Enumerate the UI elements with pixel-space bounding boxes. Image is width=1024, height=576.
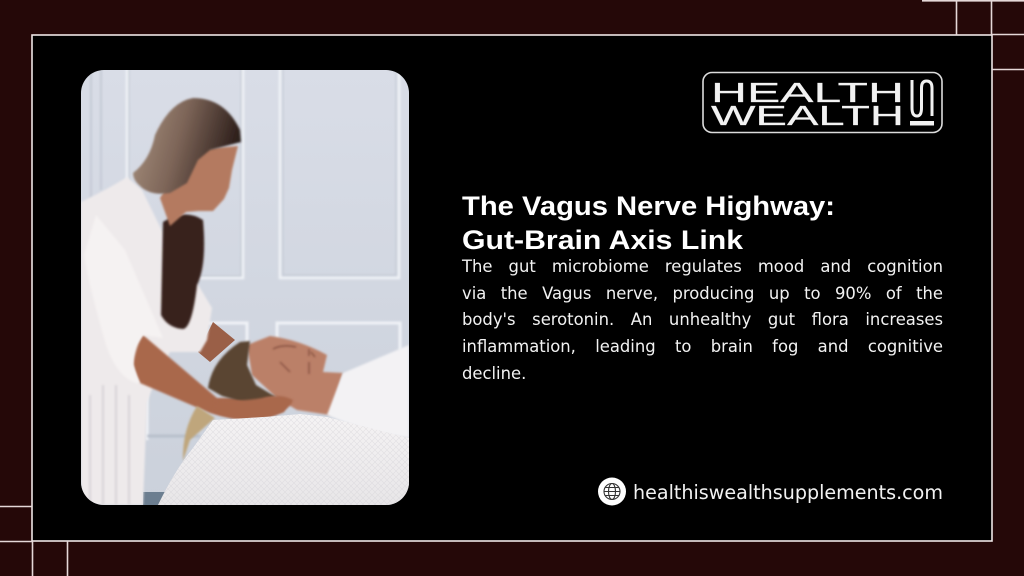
therapist far forearm (198, 322, 235, 362)
body text: inflammation, leading to brain fog and cognitive (462, 337, 943, 356)
logo wordmark: HEALTH (711, 77, 904, 108)
patient ear and therapist hand (214, 396, 293, 419)
door background (81, 70, 409, 505)
logo monogram (912, 80, 932, 116)
body text (462, 257, 943, 383)
therapist near arm (133, 335, 287, 420)
logo (703, 72, 942, 132)
website icon: globe (598, 478, 626, 506)
therapist head hair (133, 98, 241, 194)
massage table sheet (158, 414, 409, 505)
body text: The gut microbiome regulates mood and cognition (462, 257, 943, 276)
body text: via the Vagus nerve, producing up to 90% of the (462, 284, 943, 303)
long dark hair (161, 214, 204, 329)
website address: healthiswealthsupplements.com (633, 481, 943, 504)
patient hair (208, 341, 276, 404)
title: Gut-Brain Axis Link (462, 225, 744, 255)
title: The Vagus Nerve Highway: (462, 191, 835, 221)
body text: decline. (462, 364, 526, 383)
blond hair (183, 406, 215, 461)
corner grid: bottom left (0, 506, 68, 576)
logo wordmark (711, 77, 904, 131)
logo wordmark: WEALTH (711, 100, 904, 131)
corner grid: top right (922, 0, 1024, 70)
title (462, 191, 835, 255)
therapist sleeve (130, 332, 146, 384)
therapist shirt (81, 177, 212, 505)
photo: massage therapist and patient (81, 62, 409, 506)
therapist neck and face (160, 146, 238, 226)
body text: body's serotonin. An unhealthy gut flora increases (462, 310, 943, 329)
patient shirt (327, 345, 409, 438)
patient neck and face (247, 336, 343, 415)
